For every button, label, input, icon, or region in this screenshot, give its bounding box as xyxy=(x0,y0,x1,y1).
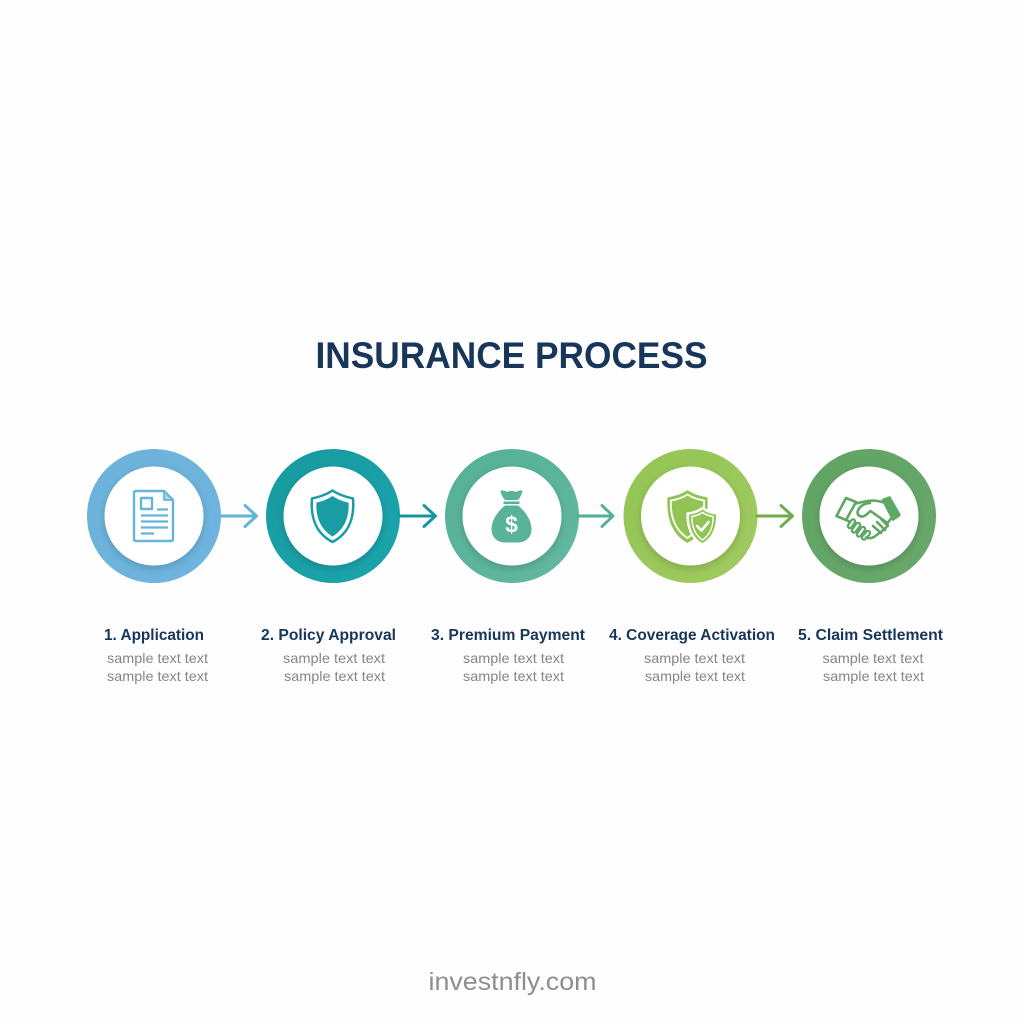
inner disc 5 xyxy=(820,466,918,566)
label 5: sample text text xyxy=(823,668,924,684)
label 2: 2. Policy Approval xyxy=(261,627,396,644)
icon: shield xyxy=(312,490,353,542)
title: INSURANCE PROCESS xyxy=(316,334,708,376)
inner disc 3 xyxy=(462,466,562,566)
inner disc 4 xyxy=(641,466,740,566)
label 1 xyxy=(104,627,208,684)
step 5: claim settlement xyxy=(802,449,936,583)
inner disc 2 xyxy=(284,466,382,566)
icon: document xyxy=(134,491,173,541)
ring 1 xyxy=(87,449,221,583)
arrow 1 to 2 xyxy=(221,506,256,526)
footer: investnfly.com xyxy=(428,968,596,996)
label 1: sample text text xyxy=(107,668,208,684)
step 2: policy approval xyxy=(266,449,400,583)
label 2 xyxy=(261,627,396,684)
step 4: coverage activation xyxy=(624,449,758,583)
label 5 xyxy=(798,627,943,684)
dollar sign: $ xyxy=(505,512,518,538)
label 2: sample text text xyxy=(284,668,385,684)
label 1: sample text text xyxy=(107,650,208,666)
icon: handshake xyxy=(836,498,900,538)
arrow 4 to 5 xyxy=(757,506,792,526)
ring 4 xyxy=(624,449,758,583)
arrow 2 to 3 xyxy=(400,506,436,526)
label 3: sample text text xyxy=(463,668,564,684)
label 4: sample text text xyxy=(645,668,745,684)
label 3 xyxy=(431,627,585,684)
arrow 3 to 4 xyxy=(578,506,613,526)
icon: double shield with check xyxy=(667,490,719,546)
step 1: application xyxy=(87,449,221,583)
label 4: sample text text xyxy=(644,650,745,666)
label 5: 5. Claim Settlement xyxy=(798,627,943,644)
inner disc 1 xyxy=(104,466,204,566)
ring 5 xyxy=(802,449,936,583)
label 3: 3. Premium Payment xyxy=(431,627,585,644)
label 4 xyxy=(609,627,775,684)
ring 3 xyxy=(445,449,579,583)
ring 2 xyxy=(266,449,400,583)
label 4: 4. Coverage Activation xyxy=(609,627,775,644)
label 1: 1. Application xyxy=(104,627,204,644)
label 5: sample text text xyxy=(822,650,924,666)
label 2: sample text text xyxy=(283,650,385,666)
step 3: premium payment xyxy=(445,449,579,583)
label 3: sample text text xyxy=(463,650,564,666)
